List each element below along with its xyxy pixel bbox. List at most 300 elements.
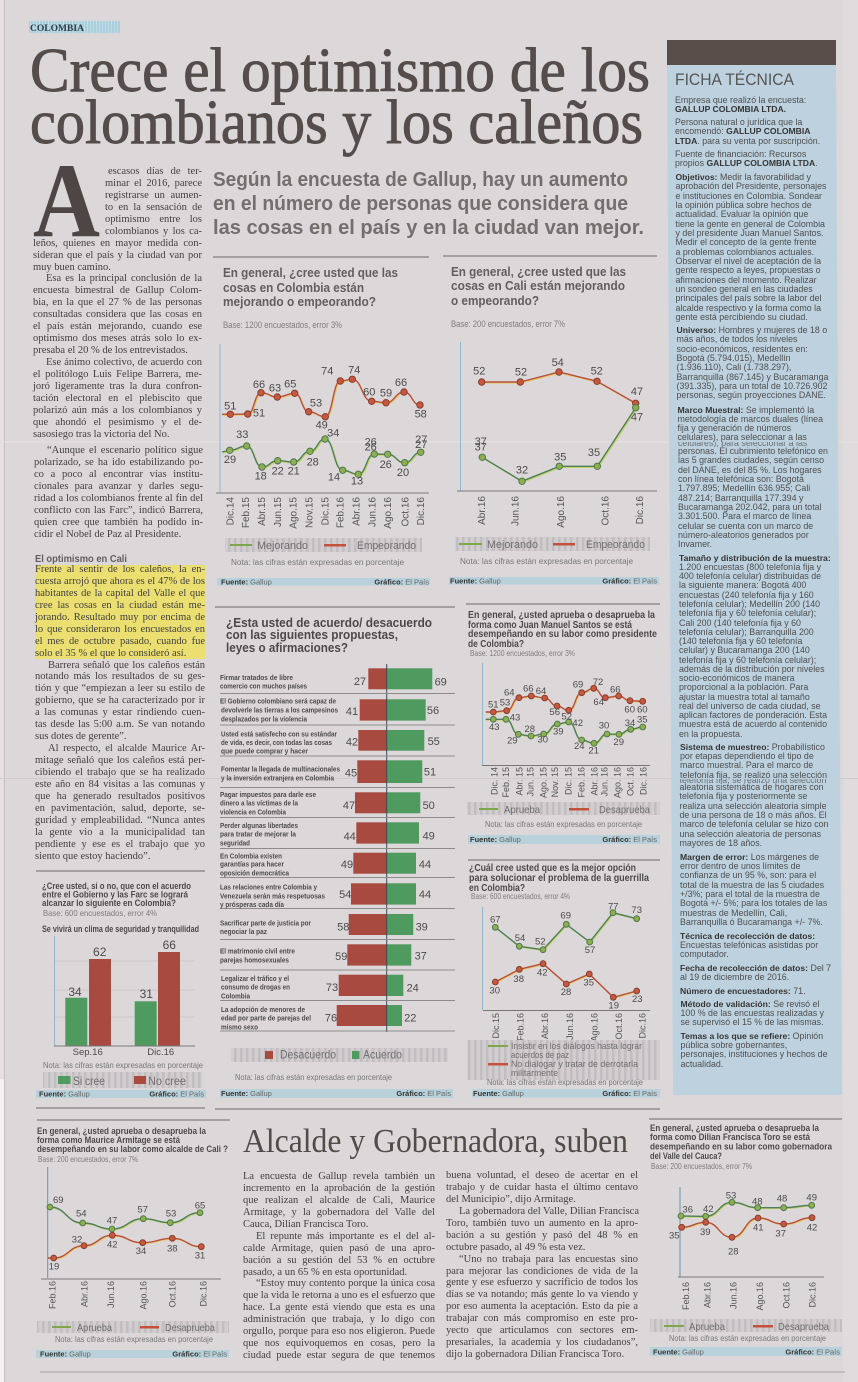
month axis bbox=[477, 496, 646, 528]
month axis: Feb.16 bbox=[336, 497, 346, 528]
article: alcalde column 2: bación a su gestión y pasó del 48 % en bbox=[446, 1230, 638, 1241]
month axis: Dic.16 bbox=[416, 497, 427, 525]
row labels: comercio con muchos países bbox=[220, 682, 307, 691]
subhead: El optimismo en Cali: El optimismo en Cali bbox=[35, 553, 127, 565]
data labels: 42 bbox=[572, 718, 583, 729]
article: alcalde column 1: pasado, a un 65 % en esta oportunidad. bbox=[243, 1266, 407, 1278]
month axis: Dic.16 bbox=[638, 1013, 648, 1039]
data labels: 37 bbox=[475, 436, 487, 448]
subheading bbox=[213, 169, 644, 239]
article: alcalde column 1: incremento en la aprobación de la gestión bbox=[243, 1183, 435, 1194]
heading: Santos chart: desempeñando en su labor como presidente bbox=[468, 629, 657, 640]
article intro column: el politólogo Luis Felipe Barrera, me- bbox=[33, 369, 202, 380]
row labels: desplazados por la violencia bbox=[221, 714, 308, 723]
bar values: 37 bbox=[415, 951, 427, 963]
data labels: 42 bbox=[807, 1223, 817, 1234]
ficha: margen de error: Barranquilla ó Bucaramanga +/- 7%. bbox=[680, 917, 823, 927]
bar values: 27 bbox=[354, 676, 366, 688]
heading: proposals chart: ¿Esta usted de acuerdo/ desacuerdo bbox=[226, 616, 432, 630]
ficha: tamaño y distribución: Tamaño y distribución de la muestra: bbox=[679, 553, 831, 563]
ficha: objetivos: gente respecto a leyes, propuestas o bbox=[676, 265, 821, 275]
bar values: 76 bbox=[325, 1013, 337, 1025]
month axis: Dic.16 bbox=[635, 496, 646, 524]
red bars: desacuerdo bbox=[337, 668, 387, 1026]
article intro column: sideran que el país y la ciudad van por bbox=[33, 250, 202, 261]
ficha: margen de error: confianza de un 95 %, son: para el bbox=[680, 870, 816, 880]
article Cali section text: que ha generado resultados positivos bbox=[35, 791, 205, 802]
ficha: tamaño y distribución: muestra está de acuerdo al contenido bbox=[679, 719, 827, 729]
data labels: 52 bbox=[591, 366, 603, 378]
article Cali section text: a las comunas y estar rindiendo cuen- bbox=[35, 707, 205, 718]
data labels: 42 bbox=[703, 1204, 714, 1215]
data labels: 34 bbox=[136, 1246, 146, 1257]
month axis: Ago.16 bbox=[383, 497, 394, 529]
ficha: marco muestral: Marco Muestral: Se implementó la bbox=[678, 404, 814, 414]
article: alcalde column 2: yecto que articulamos con sectores em- bbox=[446, 1325, 638, 1336]
article: alcalde column 2: del Municipio”, dijo Armitage. bbox=[446, 1194, 576, 1205]
ficha: sistema de muestreo: por etapas dependiendo el tipo de bbox=[680, 751, 814, 761]
legend: No dialogar y tratar de derrotarla bbox=[511, 1059, 639, 1070]
data labels: 65 bbox=[195, 1200, 205, 1211]
month axis: Dic.16 bbox=[199, 1281, 209, 1307]
month axis: Ago.16 bbox=[755, 1282, 765, 1311]
data labels bbox=[669, 1190, 817, 1257]
row labels: mismo sexo bbox=[221, 1022, 258, 1031]
article Cali section text: la gente vio a la municipalidad tan bbox=[35, 827, 205, 838]
legend bbox=[650, 1319, 842, 1333]
legend: Mejorando bbox=[257, 540, 308, 552]
row labels bbox=[220, 673, 340, 1031]
row labels: La adopción de menores de bbox=[221, 1005, 305, 1014]
bar values: 42 bbox=[346, 737, 358, 749]
data labels: 51 bbox=[224, 400, 236, 412]
data labels: 60 bbox=[363, 386, 375, 398]
bar values: 50 bbox=[423, 800, 435, 812]
bar values: 44 bbox=[419, 859, 431, 871]
ficha: universo: más años, de todos los niveles bbox=[676, 334, 797, 344]
row labels: El Gobierno colombiano será capaz de bbox=[220, 697, 336, 706]
article Cali section text: jorando. Resultado muy por encima de bbox=[35, 612, 205, 623]
ficha: tamaño y distribución: la siguiente manera: Bogotá 400 bbox=[679, 580, 806, 590]
article Cali section text: Al respecto, el alcalde Maurice Ar- bbox=[48, 743, 205, 754]
row labels: Firmar tratados de libre bbox=[220, 673, 293, 682]
data labels: 21 bbox=[288, 466, 300, 478]
month axis: Abr.16 bbox=[79, 1281, 89, 1307]
ficha: margen de error: total de la muestra de las 5 ciudades bbox=[680, 880, 824, 890]
article intro column: sasosiego tras la victoria del No. bbox=[33, 429, 169, 440]
source bar: Fuente: Gallup bbox=[470, 835, 521, 844]
source bar bbox=[449, 576, 659, 586]
data labels: 38 bbox=[513, 974, 524, 985]
row labels: Las relaciones entre Colombia y bbox=[220, 883, 318, 892]
bar values: 59 bbox=[335, 951, 347, 963]
article Cali section text: sus dotes de gerente”. bbox=[35, 731, 127, 742]
heading: Cali chart: En general, ¿cree usted que las bbox=[451, 265, 626, 279]
source bar: Gráfico: El País bbox=[172, 1350, 227, 1358]
data labels: 30 bbox=[537, 735, 548, 746]
ficha: temas: pública sobre gobernantes, bbox=[680, 1040, 787, 1050]
source bar: Gráfico: El País bbox=[396, 1089, 451, 1098]
ficha: sistema de muestreo continuation: telefonía fija y posteriormente se bbox=[680, 791, 807, 801]
source bar: Gráfico: El País bbox=[602, 576, 657, 586]
row labels: Venezuela serán más respetuosas bbox=[220, 891, 325, 900]
data labels bbox=[488, 677, 648, 756]
month axis: Feb. 16 bbox=[577, 767, 587, 798]
month axis bbox=[681, 1282, 818, 1311]
data labels: 52 bbox=[473, 366, 485, 378]
article Cali section text: el mes de octubre pasado, cuando fue bbox=[35, 636, 205, 647]
bar values: 45 bbox=[345, 767, 357, 779]
bar values: 55 bbox=[428, 736, 440, 748]
month axis: Oct.16 bbox=[614, 1013, 624, 1040]
data labels: 52 bbox=[561, 711, 572, 722]
heading: Colombia chart: mejorando o empeorando? bbox=[223, 295, 376, 309]
month axis: Nov.15 bbox=[304, 497, 316, 528]
title: Crece el optimismo de los bbox=[30, 37, 650, 105]
source bar: Gráfico: El País bbox=[374, 578, 429, 586]
data labels: 18 bbox=[255, 470, 267, 482]
line: desaprueba bbox=[679, 1215, 815, 1240]
month axis: Jun.15 bbox=[273, 497, 284, 527]
data labels: 28 bbox=[728, 1246, 739, 1257]
article: alcalde column 2: por eso aumenta la aceptación. Esto da pie a bbox=[446, 1301, 638, 1312]
article quote paragraph: ridad a los colombianos frente al fin del bbox=[34, 493, 203, 504]
panel: Colombia line chart: Base: 1200 encuestados, error 3% bbox=[223, 320, 342, 330]
article: alcalde column 1: “Estoy muy contento porque la única cosa bbox=[256, 1278, 435, 1289]
source bar: Gráfico: El País bbox=[602, 1089, 657, 1098]
data labels: 52 bbox=[535, 936, 546, 947]
article quote paragraph: quien cree que también ha podido in- bbox=[34, 517, 203, 528]
month axis: Feb.16 bbox=[515, 1013, 525, 1041]
legend: Desaprueba bbox=[165, 1322, 215, 1334]
article: alcalde column 2 bbox=[446, 1170, 639, 1360]
panel: Armitage approval line chart: Base: 200 encuestados, error 7% bbox=[38, 1155, 138, 1164]
data labels: 26 bbox=[365, 442, 377, 454]
month axis: Feb.15 bbox=[241, 497, 252, 528]
row labels: y prósperas cada día bbox=[220, 900, 285, 909]
data labels: 66 bbox=[395, 377, 407, 389]
month axis bbox=[489, 767, 648, 798]
row labels: dinero a las víctimas de la bbox=[220, 799, 299, 808]
ficha: objetivos: Observar el nivel de aceptación de la bbox=[676, 256, 821, 266]
legend: acuerdos de paz bbox=[511, 1050, 569, 1061]
ficha: margen de error bbox=[680, 852, 827, 927]
heading: Toro chart: forma como Dilian Francisca Toro se está bbox=[650, 1132, 811, 1143]
data labels: 47 bbox=[107, 1216, 117, 1227]
heading: seguridad chart: ¿Cree usted, si o no, que con el acuerdo bbox=[42, 881, 191, 891]
month axis: Dic. 15 bbox=[563, 767, 573, 795]
data labels: 54 bbox=[515, 933, 525, 944]
ficha: marco muestral continuation: Invamer. bbox=[678, 539, 712, 549]
ficha: marco muestral continuation: personas. El cubrimiento telefónico en bbox=[678, 446, 828, 456]
ficha: sistema de muestreo: Sistema de muestreo: Probabilístico bbox=[680, 742, 825, 752]
article: alcalde column 1: que la vida le retorna a uno es el esfuerzo que bbox=[243, 1290, 435, 1301]
article: alcalde column 2: presariales, la academia y los ciudadanos”, bbox=[446, 1337, 638, 1348]
data labels: 69 bbox=[560, 911, 571, 922]
row labels: de vida, es decir, con todas las cosas bbox=[221, 738, 332, 747]
row labels: para tratar de mejorar la bbox=[220, 830, 297, 839]
article Cali section text: cuesta arrojó que ahora es el 47% de los bbox=[35, 576, 205, 587]
ficha: margen de error: Bogotá +/- 5%; para los totales de las bbox=[680, 898, 827, 908]
row labels: que puede comprar y hacer bbox=[221, 747, 308, 756]
heading: Armitage chart: forma como Maurice Armitage se está bbox=[37, 1135, 181, 1146]
ficha: objetivos: la opinión pública sobre hechos de bbox=[676, 200, 812, 210]
heading: guerrilla chart: para solucionar el problema de la guerrilla bbox=[469, 873, 649, 884]
ficha: empresa: Empresa que realizó la encuesta: bbox=[675, 95, 806, 105]
data labels bbox=[49, 1195, 205, 1272]
data labels: 69 bbox=[573, 680, 583, 691]
legend: Empeorando bbox=[586, 539, 645, 551]
data labels: 35 bbox=[583, 978, 594, 989]
data labels: 29 bbox=[507, 736, 518, 747]
data labels: 39 bbox=[553, 726, 564, 737]
ficha: marco muestral continuation: las 5 grandes ciudades, según censo bbox=[678, 455, 824, 465]
article Cali section text: habitantes de la capital del Valle el que bbox=[35, 588, 205, 599]
data labels: 58 bbox=[415, 409, 427, 421]
article: alcalde column 1 bbox=[243, 1171, 435, 1361]
ficha: marco muestral: fija y generación de números bbox=[678, 423, 791, 433]
data labels: 47 bbox=[631, 386, 643, 398]
bar values: 39 bbox=[416, 921, 428, 933]
month axis: Jun.16 bbox=[368, 497, 378, 527]
bar values: 49 bbox=[423, 831, 435, 843]
ficha: tamaño y distribución: real del universo de cada ciudad, se bbox=[679, 701, 821, 711]
ficha: universo: personas, según proyecciones DANE. bbox=[676, 390, 826, 400]
month axis: Ago. 16 bbox=[613, 767, 623, 798]
data labels bbox=[224, 364, 427, 488]
month axis: Dic.14 bbox=[226, 497, 236, 525]
month axis: Abr.16 bbox=[703, 1282, 713, 1308]
row labels: El matrimonio civil entre bbox=[220, 947, 295, 956]
data labels: 64 bbox=[504, 688, 515, 699]
source bar bbox=[468, 835, 660, 844]
panel: Colombia line chart: Nota: las cifras están expresadas en porcentaje bbox=[231, 557, 404, 567]
ficha: tamaño y distribución: Cali 200 (140 telefonía fija y 60 bbox=[679, 618, 801, 628]
data labels: 27 bbox=[415, 439, 427, 451]
bar values: 69 bbox=[435, 677, 447, 689]
article intro column: optimismo dos meses atrás solo lo ex- bbox=[33, 333, 202, 344]
article: alcalde column 1: bación a su gestión del 53 % en octubre bbox=[243, 1255, 435, 1266]
ficha: persona: Persona natural o jurídica que la bbox=[675, 117, 802, 127]
ficha: objetivos bbox=[676, 172, 826, 322]
ficha: método bbox=[680, 999, 824, 1027]
bar values: 31 bbox=[140, 987, 153, 1001]
heading: proposals chart: leyes o afirmaciones? bbox=[226, 641, 348, 655]
ficha: objetivos: un sondeo general en las ciudades bbox=[676, 284, 813, 294]
article Cali section text: cree las cosas en la ciudad están me- bbox=[35, 600, 205, 611]
article: alcalde column 2: para mejorar las condiciones de vida de la bbox=[446, 1266, 638, 1276]
ficha: marco muestral continuation: con línea telefónica son: Bogotá bbox=[678, 474, 804, 484]
ficha: fuente: propios GALLUP COLOMBIA LTDA. bbox=[675, 158, 818, 168]
data labels: 28 bbox=[561, 987, 571, 998]
ficha: marco muestral bbox=[678, 404, 824, 442]
ficha: sistema de muestreo continuation: de una persona de 18 o más años. El bbox=[680, 810, 827, 820]
ficha: empresa: GALLUP COLOMBIA LTDA. bbox=[675, 104, 786, 114]
legend: No cree bbox=[148, 1074, 186, 1088]
ficha: marco muestral continuation: 1.797.895; Medellín 636.955; Cali bbox=[678, 483, 810, 493]
row labels: Pagar impuestos para darle ese bbox=[220, 790, 316, 799]
row labels: devolverle las tierras a los campesinos bbox=[221, 705, 338, 714]
article Cali section text: pendiente y ese es el trabajo que yo bbox=[35, 839, 205, 850]
bar values: 51 bbox=[424, 767, 436, 779]
data labels: 43 bbox=[510, 713, 520, 724]
month axis: Dic.15 bbox=[491, 1013, 501, 1039]
article intro column: presaba el 20 % de los entrevistados. bbox=[33, 345, 188, 356]
row labels: Sacrificar parte de justicia por bbox=[220, 918, 311, 927]
ficha: tamaño y distribución: aplican factores de ponderación. Esta bbox=[679, 710, 827, 720]
row labels: oposición democrática bbox=[220, 868, 290, 877]
row labels: edad por parte de parejas del bbox=[221, 1014, 311, 1023]
row labels: Perder algunas libertades bbox=[220, 821, 298, 830]
article Cali section text bbox=[34, 564, 205, 862]
data labels: 53 bbox=[726, 1190, 736, 1201]
month axis: Oct.16 bbox=[400, 497, 412, 526]
data labels: 48 bbox=[777, 1194, 787, 1205]
data labels: 57 bbox=[137, 1205, 148, 1216]
bar values bbox=[325, 676, 447, 1025]
bar values: 47 bbox=[343, 800, 355, 812]
article: alcalde column 1: que nos equivoquemos en cosas, pero la bbox=[243, 1338, 435, 1349]
article quote paragraph bbox=[34, 445, 203, 540]
data labels: 42 bbox=[107, 1240, 118, 1251]
bar values: 73 bbox=[326, 982, 338, 994]
data labels: 27 bbox=[415, 434, 427, 446]
legend: Aprueba bbox=[77, 1322, 112, 1334]
article intro column: el país están mejorando, cuando ese bbox=[33, 321, 202, 332]
heading: seguridad chart bbox=[42, 881, 191, 908]
heading: Colombia chart bbox=[223, 266, 398, 309]
article intro column: bia, en la que el 27 % de las personas bbox=[33, 297, 202, 308]
data labels: 54 bbox=[552, 357, 564, 369]
ficha: universo: (1.936.110), Cali (1.738.297), bbox=[676, 362, 791, 372]
ficha: universo: Bogotá (5.794.015), Medellín bbox=[676, 353, 791, 363]
month axis: Dic. 14 bbox=[489, 767, 499, 795]
data labels: 37 bbox=[475, 442, 487, 454]
article: alcalde column 1: ciudad puede estar segura de que tenemos bbox=[243, 1350, 435, 1361]
row labels: Legalizar el tráfico y el bbox=[221, 974, 289, 983]
row labels: Colombia bbox=[221, 991, 251, 1000]
heading: Colombia chart: cosas en Colombia están bbox=[223, 281, 364, 295]
month axis: Feb.16 bbox=[681, 1282, 691, 1310]
article intro column: Ese ánimo colectivo, de acuerdo con bbox=[46, 357, 202, 368]
data labels: 66 bbox=[523, 684, 534, 695]
ficha: número: Número de encuestadores: 71. bbox=[680, 986, 806, 996]
article: alcalde column 2: buena voluntad, el deseo de acertar en el bbox=[446, 1170, 638, 1181]
data labels: 29 bbox=[613, 737, 624, 748]
bar values: 62 bbox=[93, 945, 107, 959]
month axis: Abr. 16 bbox=[589, 767, 599, 796]
data labels: 63 bbox=[269, 382, 281, 394]
panel: acuerdo / desacuerdo bar chart bbox=[215, 607, 455, 1098]
heading: guerrilla chart bbox=[469, 863, 649, 894]
data labels: 32 bbox=[516, 464, 528, 476]
month axis bbox=[491, 1013, 648, 1042]
line: mejorando bbox=[479, 404, 639, 484]
drop cap: A bbox=[33, 142, 100, 259]
data labels: 49 bbox=[316, 420, 328, 432]
ficha: objetivos: tiene la gente en general de Colombia bbox=[676, 219, 825, 229]
panel: Cali line chart bbox=[443, 256, 659, 586]
line: aprueba bbox=[47, 1204, 203, 1232]
month axis: Abr.16 bbox=[540, 1013, 550, 1039]
article intro column: encuesta bimestral de Gallup Colom- bbox=[33, 285, 202, 296]
month axis: Feb.16 bbox=[48, 1281, 58, 1309]
article Cali section text: solo el 35 % el que lo consideró así. bbox=[35, 648, 186, 659]
data labels: 74 bbox=[321, 365, 333, 377]
data labels: 53 bbox=[166, 1209, 176, 1220]
data labels: 49 bbox=[806, 1193, 817, 1204]
ficha: temas: Temas a los que se refiere: Opinión bbox=[680, 1031, 823, 1041]
ficha: tamaño y distribución: (140 telefonía fija y 60 telefonía bbox=[679, 636, 802, 646]
source bar bbox=[472, 1089, 660, 1098]
heading: Santos chart bbox=[468, 610, 657, 650]
data labels: 22 bbox=[272, 466, 284, 478]
panel: seguridad bar chart: Nota: las cifras están expresadas en porcentaje bbox=[43, 1060, 203, 1070]
legend: Mejorando bbox=[487, 539, 538, 551]
article Cali section text: cibiendo el trabajo que se ha realizado bbox=[35, 767, 205, 778]
line: desaprueba bbox=[486, 685, 646, 715]
legend: Desaprueba bbox=[599, 804, 650, 816]
panel: seguridad bar chart: Sep.16 bbox=[73, 1047, 103, 1058]
panel: Cali line chart: Base: 200 encuestados, error 7% bbox=[451, 319, 565, 329]
article intro column bbox=[32, 166, 202, 440]
bar values: 49 bbox=[341, 859, 353, 871]
article intro column: tación electoral en el plebiscito que bbox=[33, 393, 202, 404]
data labels: 56 bbox=[549, 707, 560, 718]
heading: Toro chart: desempeñando en su labor como gobernadora bbox=[650, 1142, 833, 1152]
subheading: Según la encuesta de Gallup, hay un aumento bbox=[213, 169, 628, 191]
month axis: Jun.16 bbox=[510, 496, 522, 526]
bar values: 66 bbox=[163, 938, 176, 952]
heading: Cali chart: cosas en Cali están mejorando bbox=[451, 279, 625, 293]
article: alcalde column 2: Toro, también tuvo un aumento en la apro- bbox=[446, 1218, 638, 1229]
month axis: Ago.16 bbox=[139, 1281, 149, 1310]
ficha: sistema de muestreo: marco muestral. Para el marco de bbox=[680, 760, 813, 770]
ficha: fecha bbox=[680, 963, 831, 982]
article intro column: to en la sensación de bbox=[105, 202, 202, 213]
data labels: 20 bbox=[397, 467, 409, 479]
legend: Acuerdo bbox=[363, 1048, 402, 1062]
row labels: parejas homosexuales bbox=[220, 955, 289, 964]
row labels: Usted está satisfecho con su estándar bbox=[221, 729, 337, 738]
source bar: Fuente: Gallup bbox=[450, 576, 501, 586]
month axis: Oct.16 bbox=[167, 1281, 177, 1308]
panel: Armitage approval line chart bbox=[36, 1120, 230, 1358]
ficha: tamaño y distribución bbox=[679, 553, 831, 739]
article intro column: optimismo entre los bbox=[105, 214, 202, 225]
source bar bbox=[36, 1350, 229, 1358]
source bar: Fuente: Gallup bbox=[221, 1089, 272, 1098]
month axis: Jun.16 bbox=[106, 1281, 116, 1308]
article: alcalde column 2: octubre pasado, al 49 % esta vez. bbox=[446, 1242, 585, 1253]
article quote paragraph: conflicto con las Farc”, indicó Barrera, bbox=[34, 505, 203, 516]
ficha: persona: LTDA. para su venta por suscripción. bbox=[675, 136, 820, 146]
article Cali section text: lo que consideraron los encuestados en bbox=[35, 624, 205, 635]
panel: Armitage approval line chart: Nota: las cifras están expresadas en porcentaje bbox=[55, 1334, 213, 1344]
heading: Toro chart bbox=[650, 1123, 833, 1162]
article quote paragraph: co a poco al encontrar vías institu- bbox=[34, 469, 203, 480]
data labels: 47 bbox=[631, 412, 643, 424]
heading: Armitage chart: desempeñando en su labor como alcalde de Cali ? bbox=[37, 1144, 228, 1155]
ficha: tamaño y distribución: socio-económicos de manera bbox=[679, 673, 795, 683]
legend: Desaprueba bbox=[778, 1321, 829, 1333]
heading: proposals chart bbox=[226, 616, 432, 655]
data labels: 51 bbox=[488, 700, 499, 711]
ficha: temas: personajes, instituciones y hechos de bbox=[680, 1049, 828, 1059]
ficha: marco muestral continuation: 3.301.500. Para el marco de línea bbox=[678, 511, 811, 521]
article: alcalde column 2: días se va notando; más gente lo va viendo y bbox=[446, 1289, 638, 1300]
ficha: objetivos: principales del país sobre la labor del bbox=[676, 293, 822, 303]
